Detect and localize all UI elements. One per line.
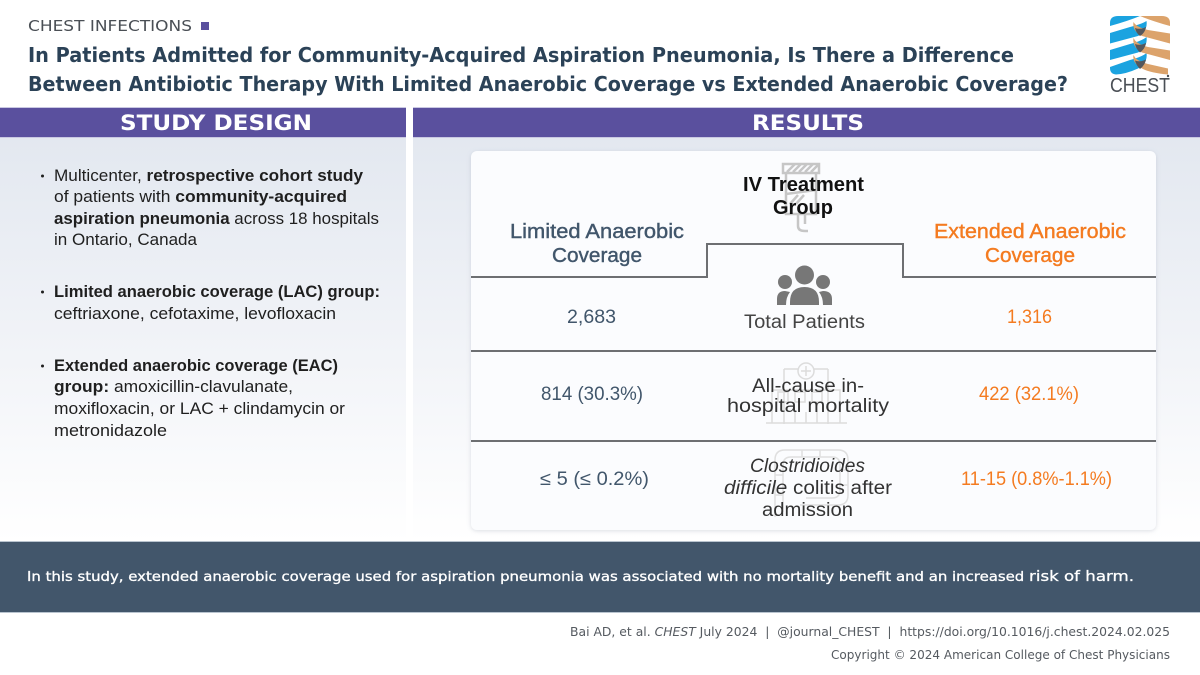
heading: study design	[0, 107, 406, 138]
text block: study design bullets: metronidazole	[54, 421, 167, 440]
column header: limited anaerobic coverage	[510, 221, 684, 267]
text block: study design bullets: in Ontario, Canada	[54, 230, 198, 249]
icon: colon	[775, 450, 848, 517]
column header: extended anaerobic coverage	[934, 221, 1126, 267]
text block: study design bullets: group: amoxicillin-clavulanate,	[54, 377, 293, 396]
row: total patients	[567, 266, 1052, 333]
column header: IV treatment group: Group	[773, 197, 833, 219]
row: c. difficile colitis: Clostridioides	[750, 456, 866, 477]
row: c. difficile colitis: admission	[762, 500, 853, 521]
title: Between Antibiotic Therapy With Limited Anaerobic Coverage vs Extended Anaerobic Coverage?	[28, 72, 1068, 96]
text block: study design bullets: Multicenter, retrospective cohort study	[54, 166, 364, 185]
icon: hospital	[766, 363, 847, 424]
text block: study design bullets: Limited anaerobic coverage (LAC) group:	[54, 282, 380, 301]
icon: IV bag	[783, 164, 819, 231]
column header: extended anaerobic coverage: Coverage	[985, 245, 1075, 267]
text block: study design bullets: aspiration pneumonia across 18 hospitals	[54, 209, 379, 228]
column header: IV treatment group: IV Treatment	[743, 174, 864, 196]
conclusion band	[0, 541, 1200, 613]
row: c. difficile colitis: ≤ 5 (≤ 0.2%)	[540, 469, 649, 490]
row: all-cause mortality: 422 (32.1%)	[979, 384, 1079, 405]
row: c. difficile colitis: 11-15 (0.8%-1.1%)	[961, 469, 1112, 490]
column header: limited anaerobic coverage: Coverage	[552, 245, 642, 267]
text block: study design bullets: of patients with community-acquired	[54, 187, 347, 206]
conclusion band: In this study, extended anaerobic coverage used for aspiration pneumonia was associated with no mortality benefit and an increased risk of harm.	[27, 569, 1134, 585]
panel: results background	[413, 137, 1200, 542]
copyright: Copyright © 2024 American College of Chest Physicians	[831, 648, 1170, 662]
column header: extended anaerobic coverage: Extended Anaerobic	[934, 221, 1126, 243]
text block: study design bullets: ceftriaxone, cefotaxime, levofloxacin	[54, 304, 336, 323]
text block: study design bullets: moxifloxacin, or LAC + clindamycin or	[54, 399, 345, 418]
heading: results: RESULTS	[752, 111, 864, 135]
panel: study design background	[0, 137, 406, 542]
logo: CHEST	[1110, 16, 1170, 97]
row: all-cause mortality: All-cause in-	[752, 376, 864, 397]
row: total patients: 2,683	[567, 307, 616, 328]
title: In Patients Admitted for Community-Acquired Aspiration Pneumonia, Is There a Difference	[28, 43, 1014, 67]
heading: study design: STUDY DESIGN	[120, 111, 312, 135]
title	[28, 43, 1068, 96]
row: all-cause mortality: hospital mortality	[727, 396, 890, 417]
icon: people	[777, 266, 832, 305]
logo: CHEST: CHEST	[1110, 75, 1170, 97]
column header: IV treatment group	[743, 174, 864, 219]
row: all-cause mortality: 814 (30.3%)	[541, 384, 643, 405]
panel: results table	[471, 151, 1156, 530]
row: all-cause mortality	[541, 363, 1079, 424]
row: total patients: 1,316	[1007, 307, 1052, 328]
text block: study design bullets	[41, 166, 380, 440]
eyebrow: chest infections: CHEST INFECTIONS	[28, 17, 192, 35]
text block: study design bullets: Extended anaerobic coverage (EAC)	[54, 356, 338, 375]
row: c. difficile colitis: difficile colitis after	[724, 478, 893, 499]
heading: results	[413, 107, 1200, 138]
citation: Bai AD, et al. CHEST July 2024 | @journal_CHEST | https://doi.org/10.1016/j.chest.2024.02.025	[570, 625, 1170, 639]
table rules	[471, 244, 1156, 441]
row: total patients: Total Patients	[744, 312, 865, 333]
column header: limited anaerobic coverage: Limited Anaerobic	[510, 221, 684, 243]
row: c. difficile colitis	[540, 450, 1112, 521]
